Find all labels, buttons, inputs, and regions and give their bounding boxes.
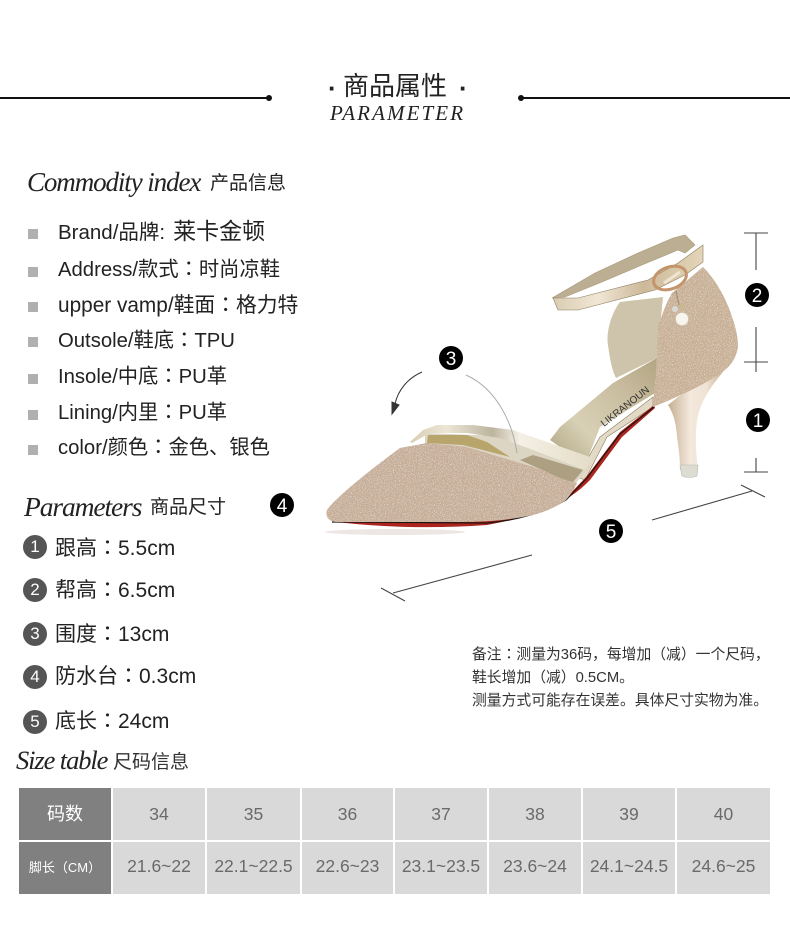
ankle strap back loop xyxy=(552,235,695,298)
heading: parameters: Parameters xyxy=(24,491,141,522)
girth: 围度：13cm xyxy=(55,623,169,646)
lining row: Lining/内里：PU革 xyxy=(58,402,227,424)
size 39 xyxy=(583,788,675,840)
band backing xyxy=(425,433,590,484)
marker 4: 4 xyxy=(277,496,288,517)
size 40: 40 xyxy=(714,804,733,824)
length marker left xyxy=(381,555,532,601)
size 37: 37 xyxy=(431,804,451,824)
girth arrow left xyxy=(392,372,422,414)
heading: parameters: 商品尺寸 xyxy=(150,497,226,518)
address row: Address/款式：时尚凉鞋 xyxy=(58,259,280,281)
inner strip xyxy=(520,455,583,482)
brand row: Brand/品牌: 莱卡金顿 xyxy=(58,218,265,244)
heading: parameters xyxy=(24,491,226,522)
size 39: 39 xyxy=(619,804,639,824)
ankle strap front xyxy=(553,245,703,310)
heading: size table xyxy=(16,745,189,775)
size 38: 38 xyxy=(525,804,545,824)
header label: foot length: 脚长（CM） xyxy=(29,860,101,875)
marker 1 xyxy=(746,408,770,432)
girth: 3 xyxy=(30,624,40,643)
heading: commodity index: 产品信息 xyxy=(210,173,286,194)
size 36 xyxy=(302,788,393,840)
sole shadow xyxy=(325,529,465,535)
length 36: 22.6~23 xyxy=(316,856,379,876)
size 34: 34 xyxy=(149,804,169,824)
header rule left xyxy=(0,95,272,101)
heel height: 跟高：5.5cm xyxy=(55,537,175,560)
heading: size table: 尺码信息 xyxy=(113,752,189,773)
length 40 xyxy=(677,842,770,894)
metal band xyxy=(410,425,593,470)
length 34 xyxy=(113,842,205,894)
height marker top xyxy=(744,233,768,372)
title: · xyxy=(459,73,468,103)
length 34: 21.6~22 xyxy=(127,856,191,876)
girth arrow right xyxy=(466,375,517,453)
insole xyxy=(550,358,657,473)
outsole row: Outsole/鞋底：TPU xyxy=(58,330,235,352)
marker 3 xyxy=(439,346,463,370)
marker 2 xyxy=(745,283,769,307)
measurement note: 测量方式可能存在误差。具体尺寸实物为准。 xyxy=(472,689,768,710)
size 35 xyxy=(207,788,300,840)
heading: size table: Size table xyxy=(16,745,107,775)
size 37 xyxy=(395,788,487,840)
length 37: 23.1~23.5 xyxy=(402,856,480,876)
header rule right xyxy=(518,95,790,101)
measurement note: 鞋长增加（减）0.5CM。 xyxy=(472,666,634,687)
marker 1: 1 xyxy=(753,411,763,432)
length 38 xyxy=(489,842,581,894)
measurement list xyxy=(23,535,196,734)
title: · xyxy=(328,73,337,103)
size 40 xyxy=(677,788,770,840)
size 38 xyxy=(489,788,581,840)
platform: 防水台：0.3cm xyxy=(55,665,196,688)
pearl charm xyxy=(672,291,688,326)
title: 商品属性 xyxy=(343,71,447,101)
heel height: 1 xyxy=(30,537,40,556)
heading: commodity index: Commodity index xyxy=(27,167,200,197)
upper row: upper vamp/鞋面：格力特 xyxy=(58,294,298,317)
stiletto heel xyxy=(668,372,723,470)
color row: color/颜色：金色、银色 xyxy=(58,430,270,460)
sole length: 5 xyxy=(30,712,40,731)
brand print on insole: LIKRANOUN xyxy=(599,385,652,429)
outsole xyxy=(332,405,655,527)
size 35: 35 xyxy=(244,804,263,824)
upper height: 帮高：6.5cm xyxy=(55,579,175,602)
length 35: 22.1~22.5 xyxy=(214,856,293,876)
title xyxy=(328,71,468,103)
marker 2: 2 xyxy=(752,286,762,307)
side metal trim xyxy=(577,397,653,480)
sole length: 底长：24cm xyxy=(55,710,169,733)
inner lining xyxy=(608,297,663,378)
attribute list xyxy=(28,218,298,460)
heading: commodity index xyxy=(27,167,286,197)
toe opening xyxy=(427,435,510,457)
header label: size: 码数 xyxy=(47,804,83,824)
length 39 xyxy=(583,842,675,894)
platform: 4 xyxy=(30,667,40,686)
heel tip xyxy=(680,465,698,478)
length 38: 23.6~24 xyxy=(503,856,567,876)
size 34 xyxy=(113,788,205,840)
heel counter xyxy=(653,267,738,407)
size 36: 36 xyxy=(338,804,357,824)
upper height: 2 xyxy=(30,580,40,599)
length 36 xyxy=(302,842,393,894)
height marker bottom xyxy=(744,458,768,472)
buckle xyxy=(650,262,690,294)
marker 3: 3 xyxy=(446,349,456,370)
marker 4 xyxy=(270,493,294,517)
size table xyxy=(19,788,770,894)
length 40: 24.6~25 xyxy=(692,856,755,876)
length marker right xyxy=(652,485,765,520)
toe vamp xyxy=(326,443,577,522)
subtitle: PARAMETER xyxy=(330,101,465,125)
header label: size xyxy=(19,788,111,840)
length 39: 24.1~24.5 xyxy=(590,856,668,876)
length 37 xyxy=(395,842,487,894)
header label: foot length xyxy=(19,842,111,894)
measurement note xyxy=(472,643,770,710)
length 35 xyxy=(207,842,300,894)
marker 5 xyxy=(599,519,623,543)
measurement note: 备注：测量为36码，每增加（减）一个尺码， xyxy=(472,643,770,664)
marker 5: 5 xyxy=(606,522,616,543)
insole row: Insole/中底：PU革 xyxy=(58,366,227,388)
